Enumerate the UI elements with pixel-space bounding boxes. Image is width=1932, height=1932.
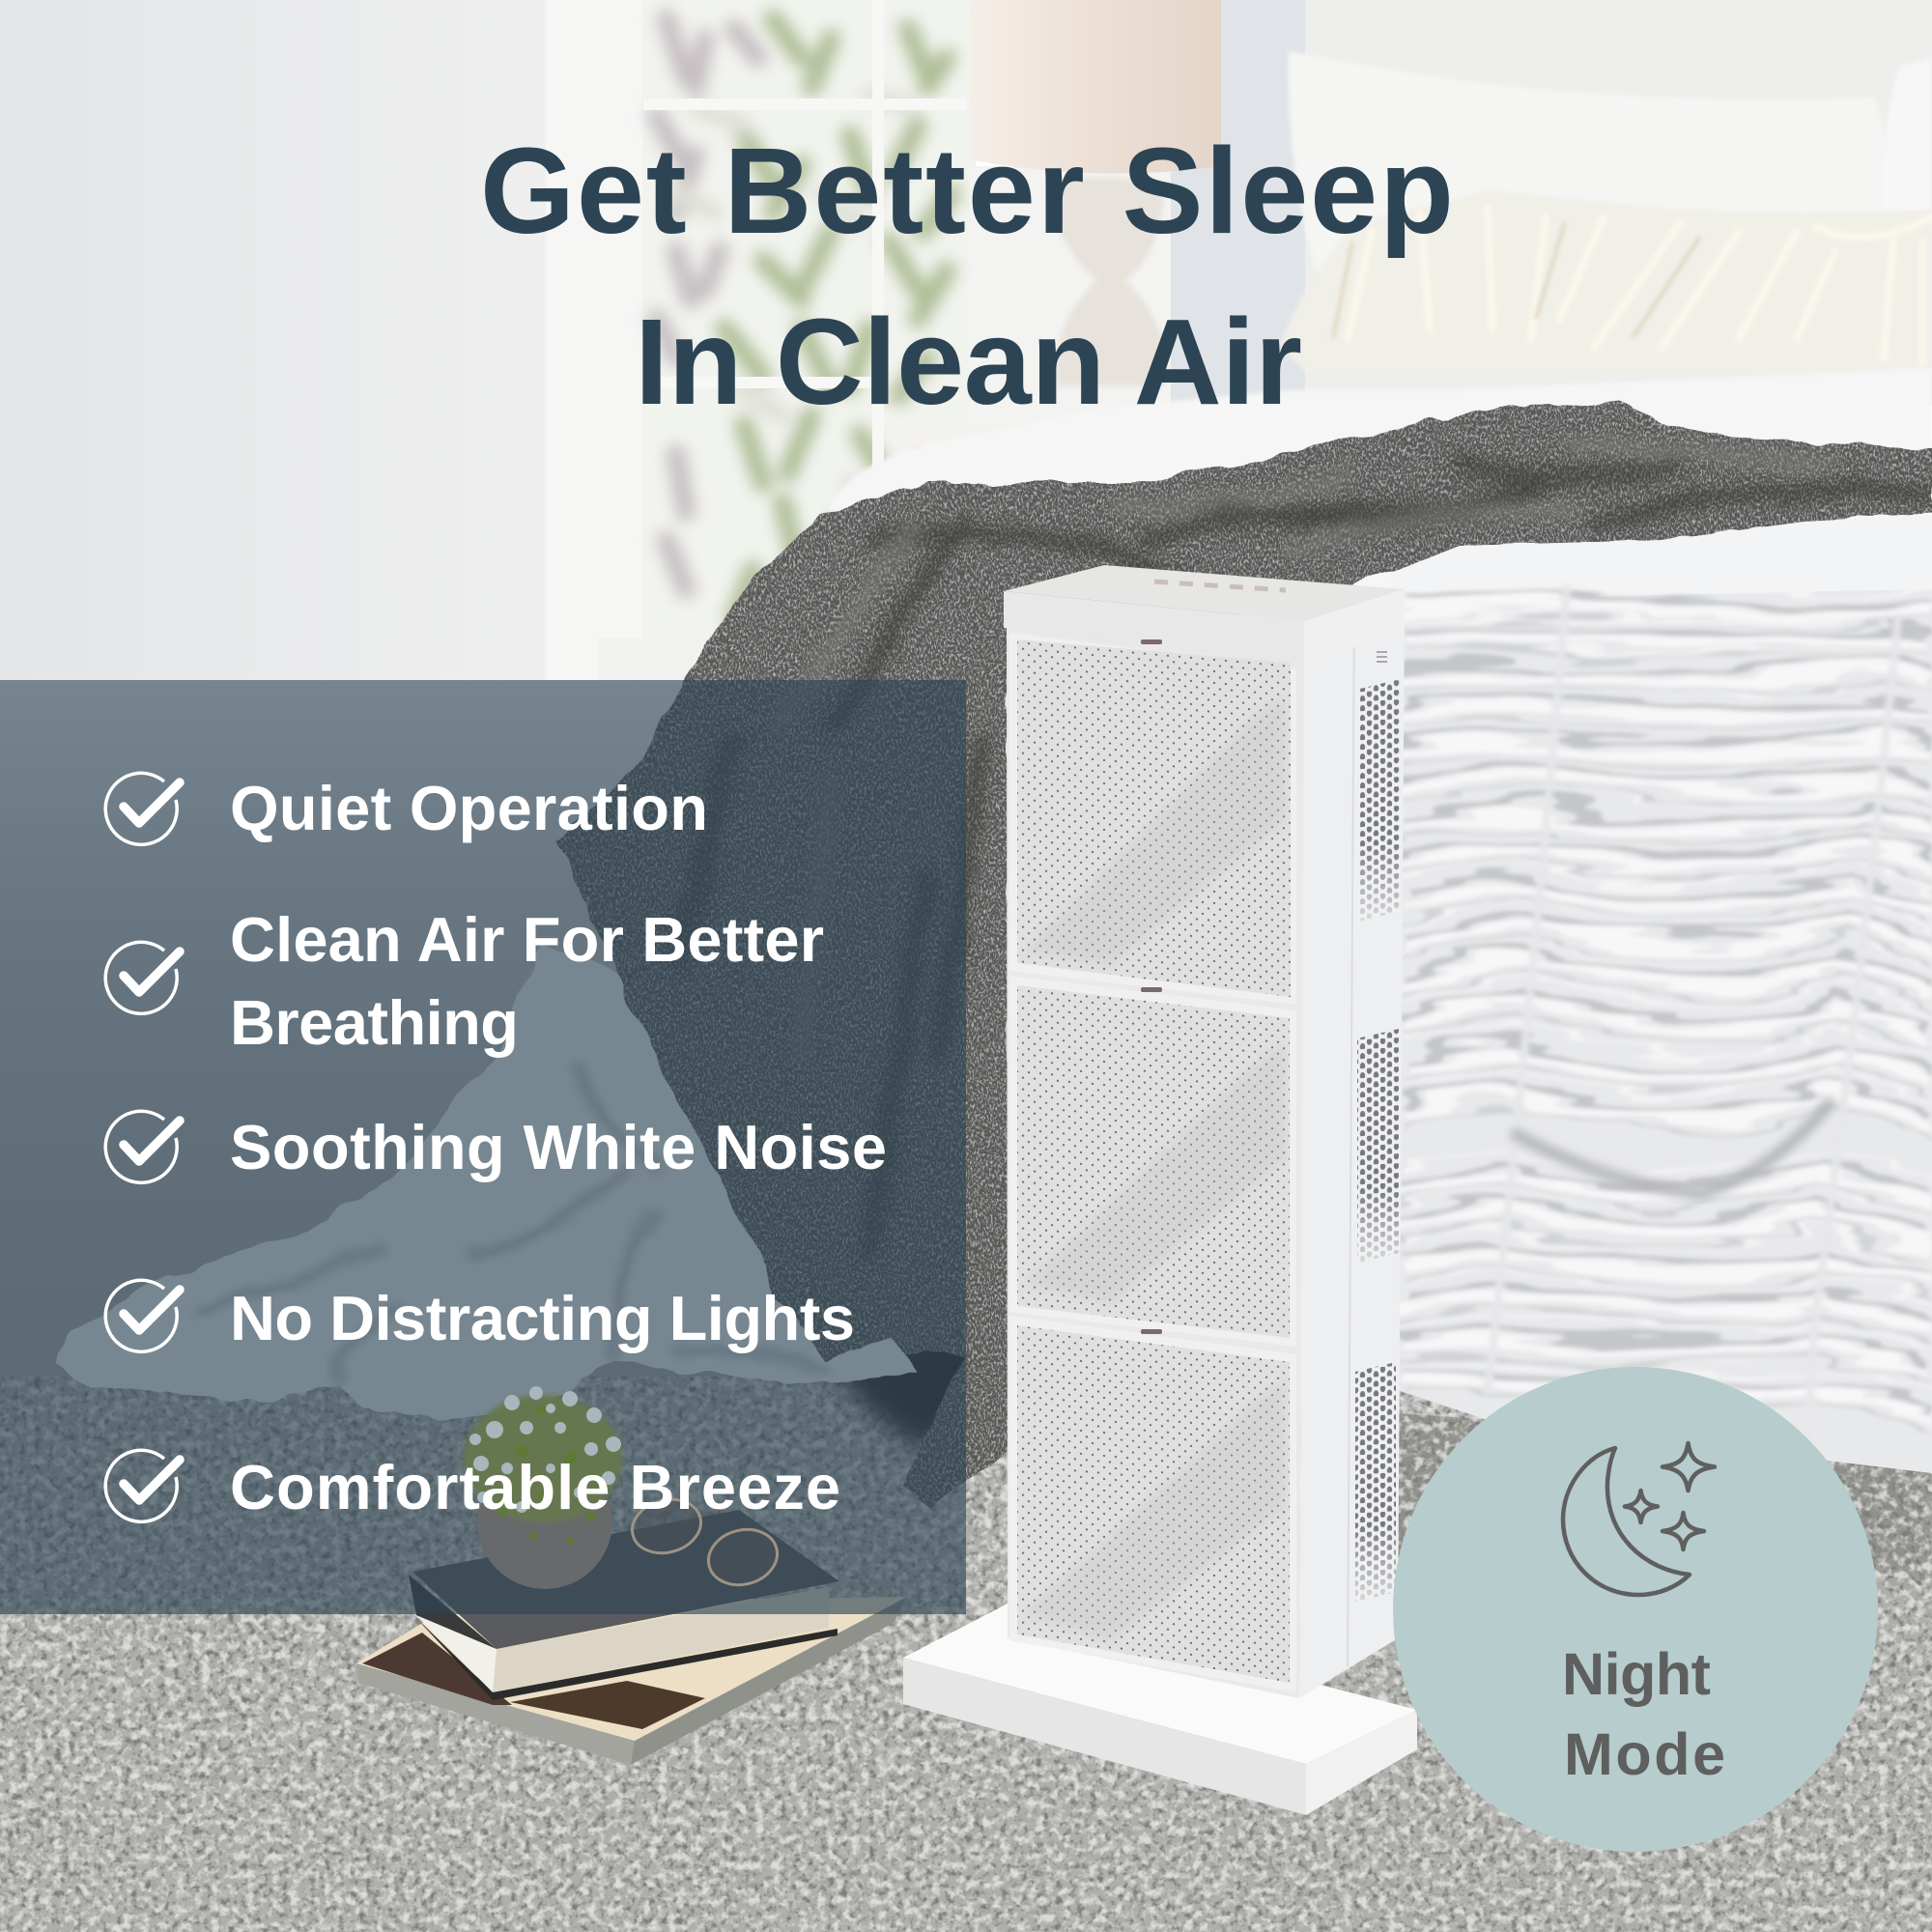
badge text xyxy=(1562,1641,1725,1787)
window with foliage xyxy=(642,0,976,639)
glass lamp base xyxy=(1048,178,1166,386)
purifier tower xyxy=(903,565,1417,1815)
wall column xyxy=(546,0,642,680)
filter panel bottom xyxy=(1009,1316,1296,1692)
tower side xyxy=(1299,589,1405,1698)
floor behind panel xyxy=(0,680,1009,1420)
glasses xyxy=(626,1492,783,1592)
feature: quiet operation: Quiet Operation xyxy=(230,773,708,843)
feature: clean air: Breathing xyxy=(230,987,519,1058)
white ruffled bedding xyxy=(1391,515,1932,1473)
upper book xyxy=(409,1510,839,1700)
filter panel middle xyxy=(1009,976,1296,1347)
side table xyxy=(895,421,1059,493)
shadow under blanket xyxy=(831,1314,1009,1449)
headboard xyxy=(1305,0,1932,406)
icon: moon and stars xyxy=(1563,1443,1715,1595)
feature: no lights: No Distracting Lights xyxy=(230,1283,855,1353)
dark knit blanket xyxy=(556,397,1932,1509)
feature: breeze: Comfortable Breeze xyxy=(230,1452,840,1522)
feature: white noise: Soothing White Noise xyxy=(230,1112,887,1182)
bluish wall column xyxy=(1171,0,1311,406)
carpet xyxy=(0,1372,1932,1932)
filter panel top xyxy=(1009,633,1296,1005)
wall xyxy=(0,0,618,680)
plinth base xyxy=(903,1604,1417,1815)
feature: clean air xyxy=(105,904,824,1058)
title xyxy=(480,123,1454,430)
night mode badge xyxy=(1393,1367,1878,1852)
top cap xyxy=(1004,565,1405,667)
badge text: Mode xyxy=(1564,1721,1725,1787)
title: Get Better Sleep xyxy=(480,123,1454,259)
far right pillow xyxy=(1883,58,1932,232)
cream pillow xyxy=(1280,190,1932,372)
wall behind lamp xyxy=(970,166,1173,427)
feature list xyxy=(105,773,887,1522)
lamp shade xyxy=(970,0,1221,174)
side vents xyxy=(1355,652,1400,1602)
plant xyxy=(464,1386,622,1545)
title: In Clean Air xyxy=(635,294,1302,430)
wall base under window xyxy=(599,639,792,682)
book stack xyxy=(356,1510,907,1765)
duvet on bed xyxy=(828,368,1932,618)
pot xyxy=(477,1454,612,1589)
white pillow xyxy=(1289,51,1913,338)
badge text: Night xyxy=(1562,1641,1711,1707)
feature panel xyxy=(0,680,966,1614)
tower front xyxy=(1007,628,1304,1698)
white duvet on floor xyxy=(58,947,918,1418)
lower book xyxy=(356,1597,907,1765)
feature: clean air: Clean Air For Better xyxy=(230,904,824,975)
